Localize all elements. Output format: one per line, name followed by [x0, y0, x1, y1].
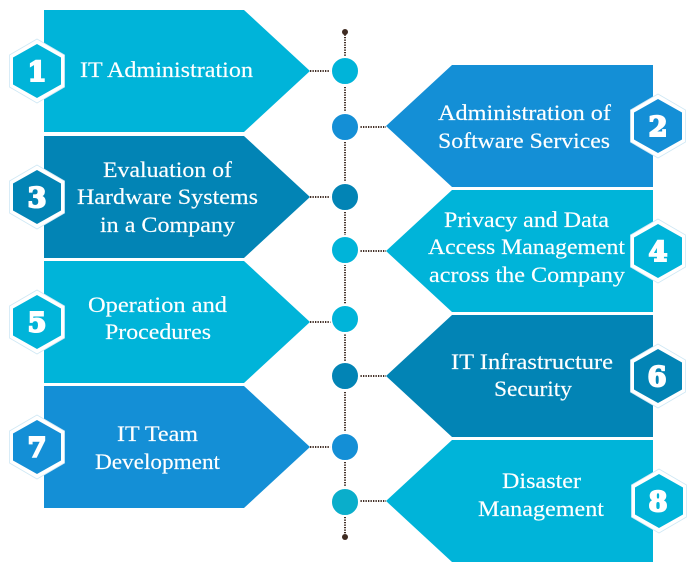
dotted connectors — [310, 71, 386, 501]
timeline nodes — [331, 57, 359, 516]
panel 4: Privacy and Data Access Management across the Company: 4 — [649, 237, 667, 268]
panel 3: Evaluation of Hardware Systems in a Company: Hardware Systems — [77, 184, 258, 209]
panel 3: Evaluation of Hardware Systems in a Company — [10, 136, 310, 258]
panel 6: IT Infrastructure Security: 6 — [648, 362, 666, 393]
panel 5: Operation and Procedures — [10, 261, 310, 383]
panel 6: IT Infrastructure Security: IT Infrastructure — [451, 349, 613, 374]
panel 7: IT Team Development: 7 — [28, 433, 46, 464]
panel 3: Evaluation of Hardware Systems in a Company: 3 — [28, 183, 46, 214]
panel 2: Administration of Software Services: 2 — [649, 112, 667, 143]
panel 8: Disaster Management: Disaster — [502, 468, 582, 493]
panel 2: Administration of Software Services: Software Services — [438, 128, 610, 153]
panel 5: Operation and Procedures: 5 — [28, 308, 46, 339]
panel 4: Privacy and Data Access Management across the Company: across the Company — [429, 262, 625, 287]
panel 3: Evaluation of Hardware Systems in a Company: Evaluation of — [103, 157, 233, 182]
panel 1: IT Administration: IT Administration — [80, 57, 253, 82]
panel 1: IT Administration: 1 — [28, 57, 46, 88]
central dotted timeline — [342, 29, 348, 540]
panel 7: IT Team Development — [10, 386, 310, 508]
panel 8: Disaster Management: 8 — [649, 487, 667, 518]
panel 4: Privacy and Data Access Management across the Company: Access Management — [428, 234, 625, 259]
panel 4: Privacy and Data Access Management across the Company — [386, 190, 686, 312]
panel 2: Administration of Software Services — [386, 65, 686, 187]
panel 7: IT Team Development: Development — [95, 449, 220, 474]
panel 2: Administration of Software Services: Administration of — [438, 100, 612, 125]
panel 3: Evaluation of Hardware Systems in a Company: in a Company — [100, 212, 235, 237]
panel 8: Disaster Management: Management — [478, 496, 604, 521]
panel 6: IT Infrastructure Security — [386, 315, 686, 437]
panel 5: Operation and Procedures: Procedures — [105, 319, 211, 344]
panel 7: IT Team Development: IT Team — [117, 421, 198, 446]
panel 8: Disaster Management — [386, 440, 686, 562]
panel 6: IT Infrastructure Security: Security — [494, 376, 572, 401]
panel 5: Operation and Procedures: Operation and — [88, 292, 227, 317]
panel 4: Privacy and Data Access Management across the Company: Privacy and Data — [444, 207, 609, 232]
panel 1: IT Administration — [10, 10, 310, 132]
